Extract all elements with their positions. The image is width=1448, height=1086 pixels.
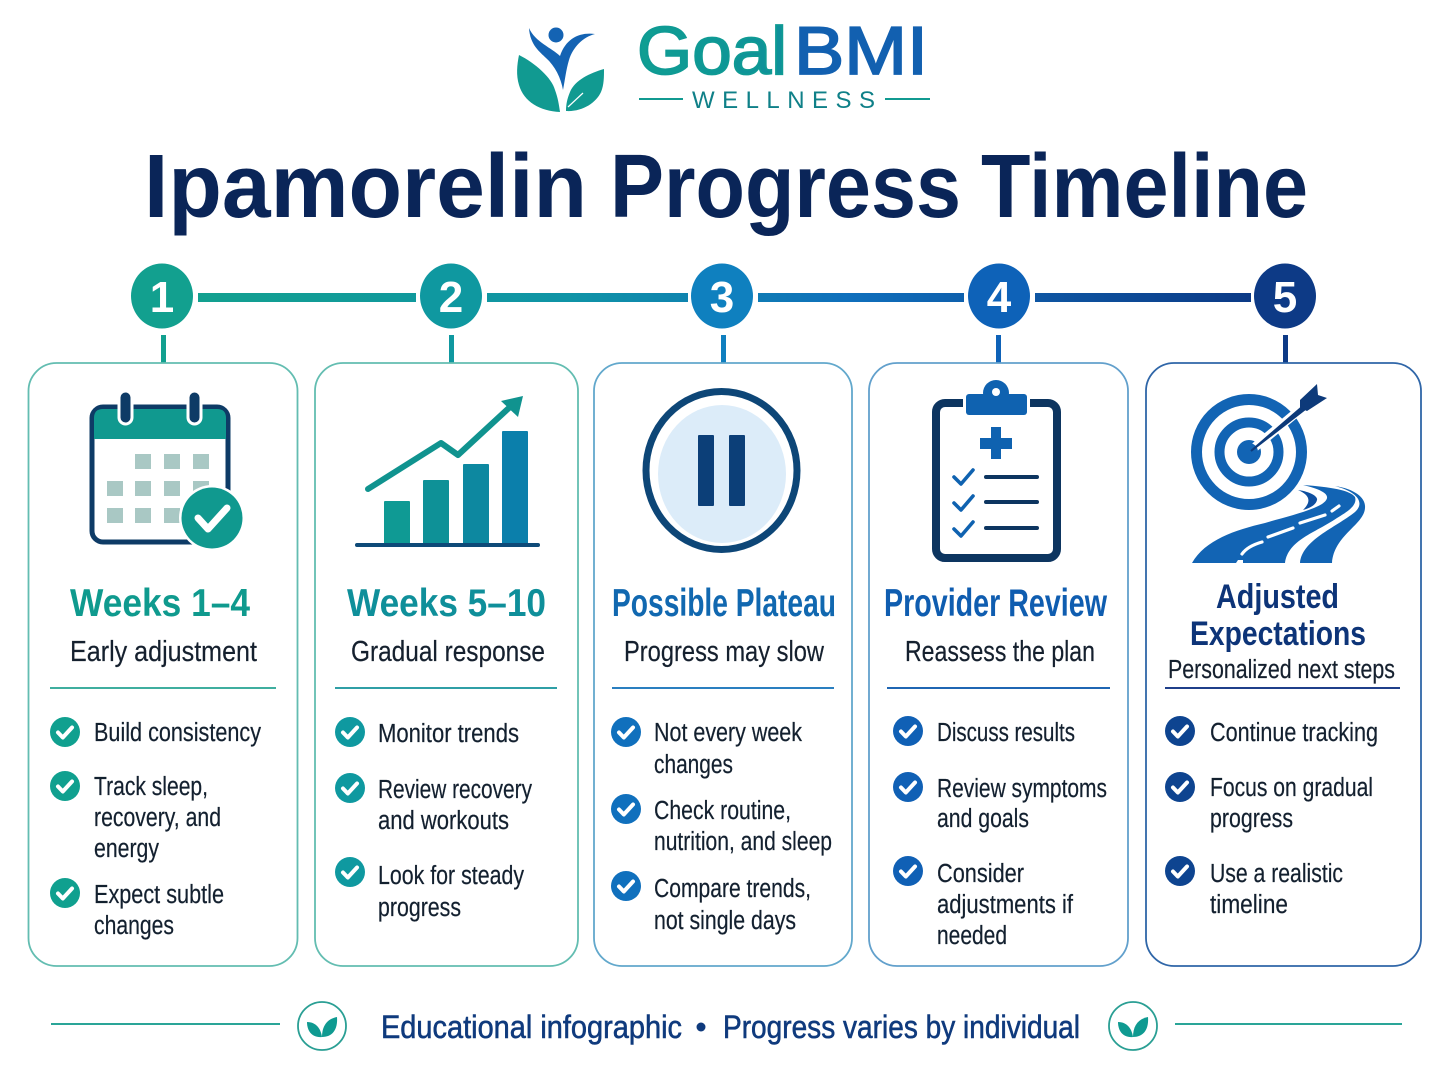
- heading: weeks 5-10: Weeks 5–10: [347, 582, 546, 625]
- heading: weeks 1-4: Weeks 1–4: [70, 582, 250, 625]
- checklist: provider review: needed: [937, 922, 1007, 950]
- checklist: provider review: Consider: [937, 860, 1024, 888]
- checklist: weeks 1-4: changes: [94, 912, 174, 940]
- checklist: adjusted expectations: timeline: [1210, 891, 1288, 919]
- checklist: weeks 1-4: Expect subtle: [94, 881, 224, 909]
- logo wordmark: Goal: [637, 13, 787, 89]
- subtitle: gradual response: Gradual response: [351, 636, 545, 668]
- panel: weeks 5-10: [315, 363, 578, 966]
- panel: possible plateau: [594, 363, 852, 966]
- title: Timeline: [981, 137, 1308, 237]
- logo: GoalBMI Wellness: [517, 13, 930, 114]
- subtitle: progress may slow: Progress may slow: [624, 636, 824, 668]
- logo wordmark: WELLNESS: [692, 87, 875, 114]
- heading: provider review: Provider Review: [884, 582, 1107, 625]
- step 1 marker: 1: [150, 273, 174, 322]
- checklist: possible plateau: not single days: [654, 907, 796, 935]
- checklist: weeks 5-10: and workouts: [378, 807, 509, 835]
- logo icon: figure and leaves: [517, 28, 604, 112]
- checklist: possible plateau: Check routine,: [654, 797, 791, 825]
- step 4 marker: [968, 264, 1030, 363]
- footer: [51, 1002, 1402, 1050]
- checklist: provider review: Discuss results: [937, 719, 1075, 747]
- footer note: [381, 1009, 1080, 1045]
- step 5 marker: [1254, 264, 1316, 363]
- heading: adjusted expectations: [1190, 578, 1366, 653]
- checklist: adjusted expectations: progress: [1210, 805, 1293, 833]
- panel: adjusted expectations: [1146, 363, 1421, 966]
- checklist: weeks 5-10: [335, 717, 532, 922]
- icon: target and road: [1192, 384, 1365, 563]
- heading: adjusted expectations: Adjusted: [1216, 578, 1339, 616]
- checklist: weeks 1-4: recovery, and: [94, 804, 221, 832]
- checklist: adjusted expectations: Use a realistic: [1210, 860, 1343, 888]
- checklist: possible plateau: Not every week: [654, 719, 802, 747]
- checklist: possible plateau: Compare trends,: [654, 875, 811, 903]
- heading: adjusted expectations: Expectations: [1190, 615, 1366, 653]
- logo wordmark: BMI: [794, 13, 928, 89]
- checklist: weeks 5-10: progress: [378, 894, 461, 922]
- footer note: Educational infographic: [381, 1009, 682, 1045]
- checklist: provider review: Review symptoms: [937, 775, 1107, 803]
- checklist: weeks 5-10: Monitor trends: [378, 720, 519, 748]
- icon: calendar with check: [92, 391, 245, 551]
- panel: provider review: [869, 363, 1128, 966]
- step 4 marker: 4: [987, 273, 1012, 322]
- icon: growth chart: [355, 396, 540, 547]
- checklist: adjusted expectations: Focus on gradual: [1210, 774, 1373, 802]
- title: Ipamorelin: [144, 137, 587, 237]
- icon: right leaf badge: [1109, 1002, 1157, 1050]
- checklist: weeks 1-4: [50, 717, 261, 940]
- subtitle: reassess the plan: Reassess the plan: [905, 636, 1095, 668]
- connector lines: [198, 293, 1251, 302]
- title: Progress: [610, 137, 961, 237]
- footer note: Progress varies by individual: [723, 1009, 1080, 1045]
- checklist: possible plateau: nutrition, and sleep: [654, 828, 832, 856]
- icon: left leaf badge: [298, 1002, 346, 1050]
- subtitle: early adjustment: Early adjustment: [70, 636, 257, 668]
- checklist: weeks 1-4: Build consistency: [94, 719, 261, 747]
- subtitle: personalized next steps: Personalized next steps: [1168, 656, 1395, 684]
- checklist: adjusted expectations: [1165, 716, 1378, 919]
- icon: clipboard: [936, 380, 1057, 558]
- title: [144, 137, 1308, 237]
- checklist: adjusted expectations: Continue tracking: [1210, 719, 1378, 747]
- step 2 marker: [420, 264, 482, 363]
- checklist: weeks 5-10: Look for steady: [378, 862, 524, 890]
- step 3 marker: [691, 264, 753, 363]
- logo wordmark: [637, 13, 930, 114]
- checklist: weeks 1-4: Track sleep,: [94, 773, 208, 801]
- panel: weeks 1-4: [28, 363, 298, 966]
- heading: possible plateau: Possible Plateau: [612, 582, 836, 625]
- step 5 marker: 5: [1273, 273, 1297, 322]
- step 3 marker: 3: [710, 273, 734, 322]
- checklist: possible plateau: [611, 717, 832, 935]
- step 2 marker: 2: [439, 273, 463, 322]
- checklist: provider review: adjustments if: [937, 891, 1074, 919]
- checklist: weeks 5-10: Review recovery: [378, 776, 532, 804]
- checklist: weeks 1-4: energy: [94, 835, 159, 863]
- checklist: provider review: and goals: [937, 805, 1029, 833]
- icon: pause button: [646, 392, 797, 550]
- timeline: [131, 264, 1316, 363]
- checklist: provider review: [893, 716, 1107, 950]
- step 1 marker: [131, 264, 193, 363]
- checklist: possible plateau: changes: [654, 751, 733, 779]
